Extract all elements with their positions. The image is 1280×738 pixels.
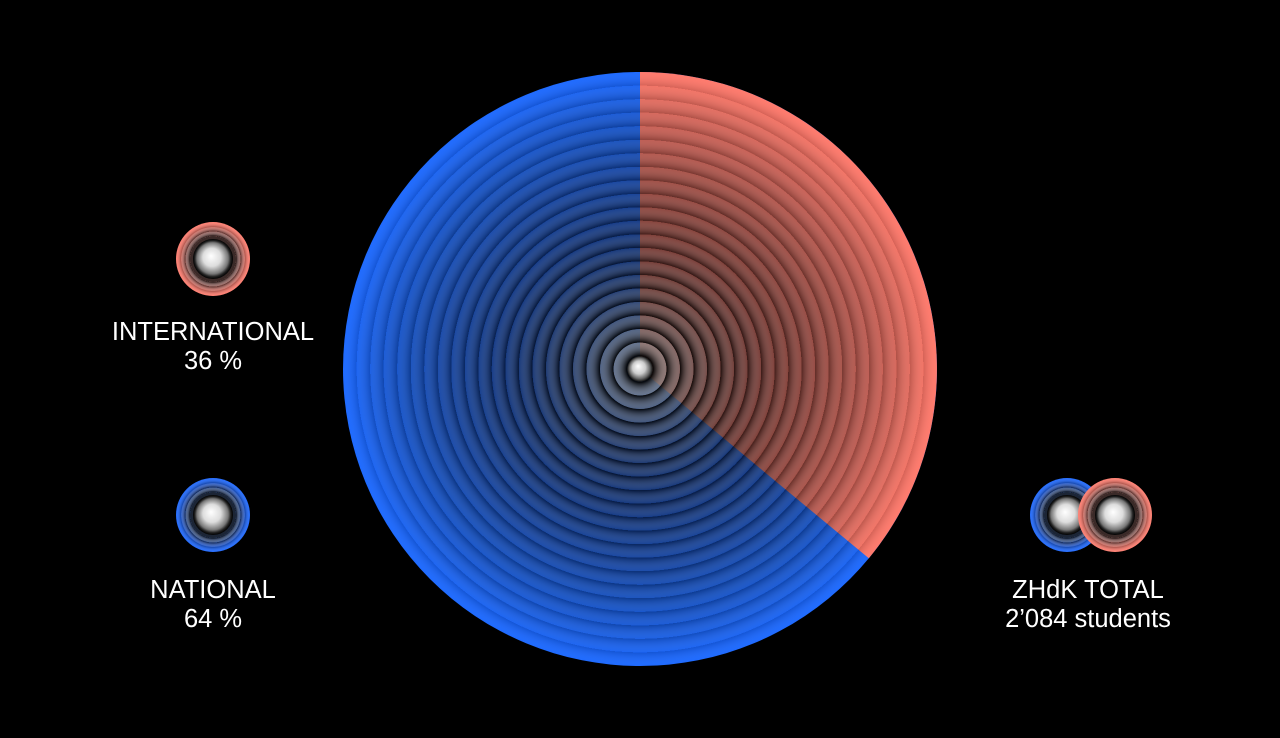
label: ZHdK total: ZHdK TOTAL — [1012, 576, 1164, 604]
pie slice: international 36% — [640, 72, 937, 558]
label: international — [112, 318, 314, 375]
label: ZHdK total — [1005, 576, 1171, 633]
icon: ZHdK total — [1030, 478, 1152, 552]
center disc — [627, 356, 653, 382]
pie slice: national 64% — [343, 72, 937, 666]
icon: national — [176, 478, 250, 552]
label: international: 36 % — [184, 347, 242, 375]
label: national — [150, 576, 276, 633]
icon: international — [176, 222, 250, 296]
label: international: INTERNATIONAL — [112, 318, 314, 346]
label: national: 64 % — [184, 605, 242, 633]
label: national: NATIONAL — [150, 576, 276, 604]
label: ZHdK total: 2’084 students — [1005, 605, 1171, 633]
pie chart: international vs national — [343, 72, 937, 666]
